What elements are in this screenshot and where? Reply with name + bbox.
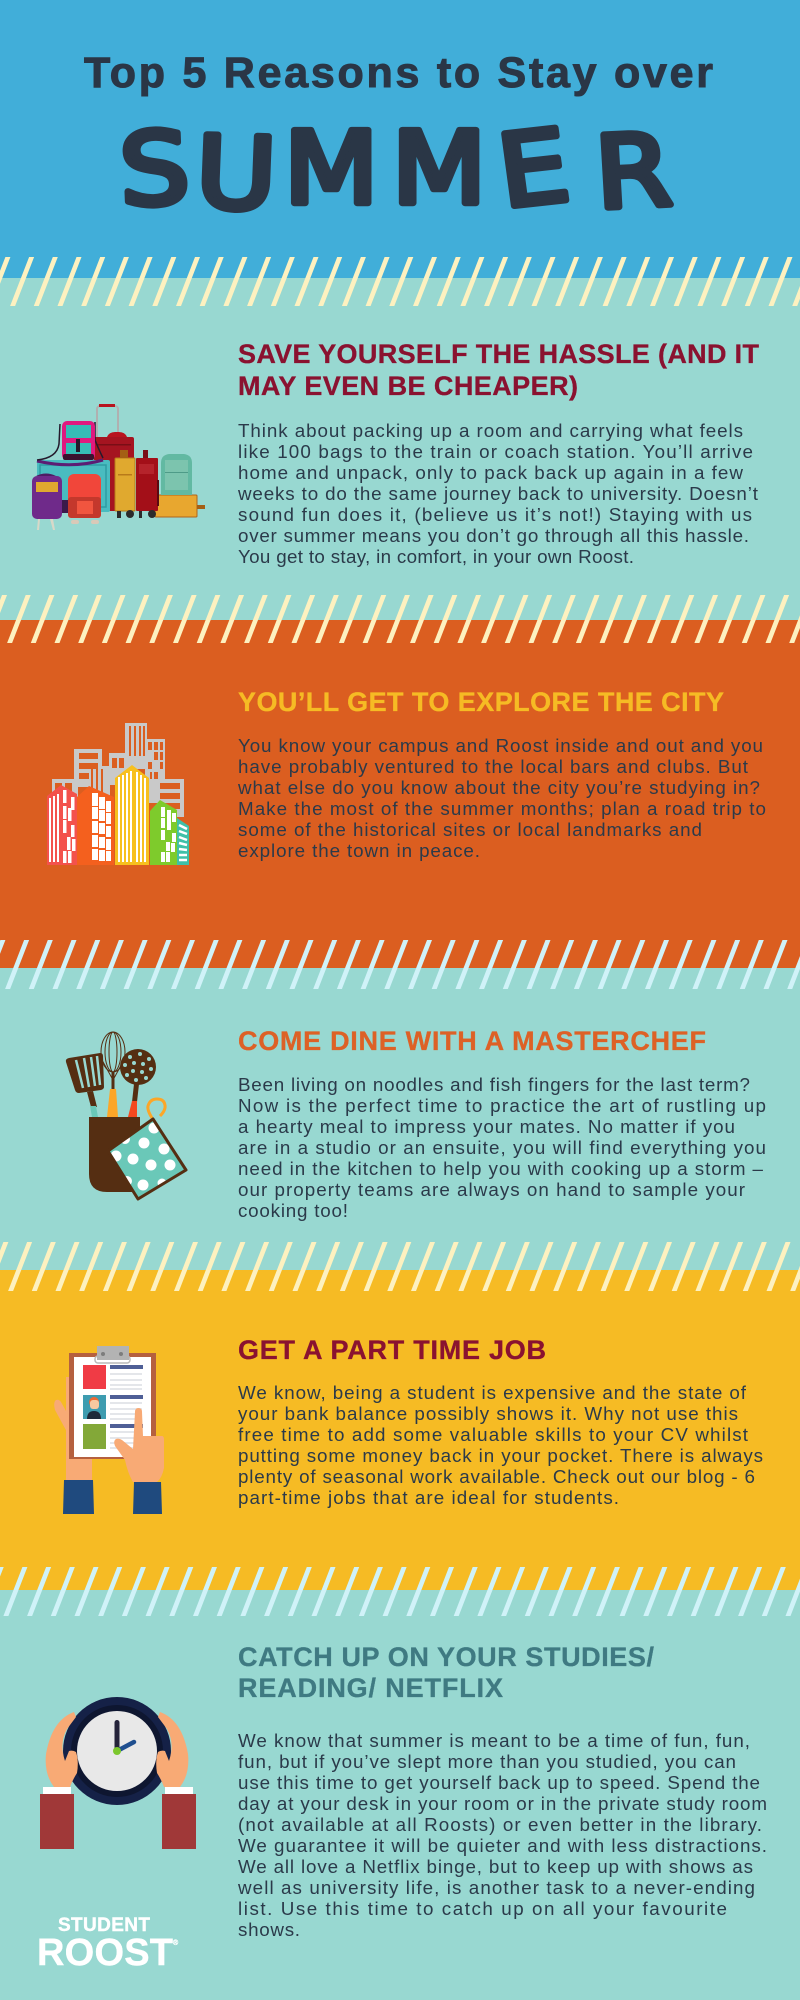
text block: section 5 <box>237 1730 767 1940</box>
heading: section 5: READING/ NETFLIX <box>238 1673 503 1703</box>
heading: section 5 <box>238 1642 654 1703</box>
text block: section 2: have probably ventured to the local bars and clubs. But <box>238 756 749 777</box>
logo: student roost <box>37 1915 179 1974</box>
panel: section 5 background <box>0 1590 800 2000</box>
title line: top 5 reasons: Top 5 Reasons to Stay over <box>84 49 713 97</box>
text block: section 5: fun, but if you’ve slept more than you studied, you can <box>238 1751 736 1772</box>
text block: section 1: weeks to do the same journey back to university. Doesn’t <box>237 483 759 504</box>
text block: section 3: need in the kitchen to help you with cooking up a storm – <box>238 1158 764 1179</box>
panel: section 1 background <box>0 278 800 620</box>
logo: student roost: STUDENT <box>58 1915 150 1936</box>
icon: kitchen utensils pot <box>66 1032 186 1199</box>
heading: section 2: YOU’LL GET TO EXPLORE THE CITY <box>238 687 724 717</box>
heading: section 1: SAVE YOURSELF THE HASSLE (AND IT <box>238 339 760 369</box>
text block: section 3: Now is the perfect time to practice the art of rustling up <box>238 1095 766 1116</box>
text block: section 4: We know, being a student is expensive and the state of <box>238 1382 747 1403</box>
text block: section 2: what else do you know about the city you’re studying in? <box>237 777 760 798</box>
panel: header background <box>0 0 800 278</box>
text block: section 3: a hearty meal to impress your mates. No matter if you <box>238 1116 735 1137</box>
text block: section 5: use this time to get yourself back up to speed. Spend the <box>238 1772 760 1793</box>
text block: section 4: part-time jobs that are ideal for students. <box>238 1487 619 1508</box>
text block: section 1 <box>237 420 759 567</box>
text block: section 1: You get to stay, in comfort, in your own Roost. <box>238 546 634 567</box>
icon: hands holding CV clipboard <box>54 1346 164 1514</box>
text block: section 2: You know your campus and Roost inside and out and you <box>238 735 763 756</box>
section 2: explore the city <box>47 687 766 865</box>
text block: section 3: are in a studio or an ensuite, you will find everything you <box>238 1137 766 1158</box>
title <box>84 49 713 233</box>
icon: luggage pile <box>32 404 205 530</box>
text block: section 5: We all love a Netflix binge, but to keep up with shows as <box>238 1856 753 1877</box>
text block: section 4 <box>238 1382 763 1508</box>
text block: section 1: home and unpack, only to pack back up again in a few <box>238 462 743 483</box>
heading: section 1 <box>238 339 760 401</box>
panel: section 4 background <box>0 1270 800 1590</box>
icon: hands holding clock <box>40 1697 196 1849</box>
text block: section 2: Make the most of the summer months; plan a road trip to <box>238 798 766 819</box>
text block: section 1: sound fun does it, (believe us it’s not!) Staying with us <box>238 504 752 525</box>
heading: section 3: COME DINE WITH A MASTERCHEF <box>238 1026 706 1056</box>
text block: section 1: like 100 bags to the train or coach station. You’ll arrive <box>238 441 753 462</box>
text block: section 3 <box>238 1074 766 1221</box>
heading: section 4: GET A PART TIME JOB <box>238 1335 546 1365</box>
text block: section 1: over summer means you don’t go through all this hassle. <box>238 525 749 546</box>
heading: section 1: MAY EVEN BE CHEAPER) <box>238 371 578 401</box>
section 5: catch up on your studies <box>37 1642 767 1974</box>
text block: section 3: Been living on noodles and fish fingers for the last term? <box>238 1074 750 1095</box>
text block: section 4: your bank balance possibly shows it. Why not use this <box>238 1403 738 1424</box>
text block: section 4: free time to add some valuable skills to your CV whilst <box>238 1424 749 1445</box>
text block: section 2: some of the historical sites or local landmarks and <box>238 819 702 840</box>
text block: section 5: list. Use this time to catch up on all your favourite <box>238 1898 727 1919</box>
logo: student roost: ROOST <box>37 1932 173 1974</box>
text block: section 5: (not available at all Roosts) or even better in the library. <box>238 1814 762 1835</box>
text block: section 2: explore the town in peace. <box>238 840 480 861</box>
panel: section 2 background <box>0 620 800 968</box>
section 1: save yourself the hassle <box>32 339 760 567</box>
text block: section 1: Think about packing up a room and carrying what feels <box>238 420 743 441</box>
logo: student roost: ® <box>173 1939 179 1947</box>
heading: section 5: CATCH UP ON YOUR STUDIES/ <box>238 1642 654 1672</box>
text block: section 3: our property teams are always on hand to sample your <box>238 1179 745 1200</box>
text block: section 4: plenty of seasonal work available. Check out our blog - 6 <box>238 1466 755 1487</box>
text block: section 4: putting some money back in your pocket. There is always <box>238 1445 763 1466</box>
title word: summer: SUMMER <box>117 107 675 233</box>
panel: section 3 background <box>0 968 800 1270</box>
text block: section 5: shows. <box>238 1919 300 1940</box>
text block: section 5: well as university life, is another task to a never-ending <box>237 1877 755 1898</box>
text block: section 3: cooking too! <box>238 1200 348 1221</box>
text block: section 5: We guarantee it will be quieter and with less distractions. <box>238 1835 767 1856</box>
section 4: part time job <box>54 1335 763 1514</box>
text block: section 5: We know that summer is meant to be a time of fun, fun, <box>238 1730 750 1751</box>
icon: colourful city <box>47 723 189 865</box>
section 3: come dine with a masterchef <box>66 1026 766 1221</box>
text block: section 2 <box>237 735 766 861</box>
text block: section 5: day at your desk in your room or in the private study room <box>238 1793 767 1814</box>
